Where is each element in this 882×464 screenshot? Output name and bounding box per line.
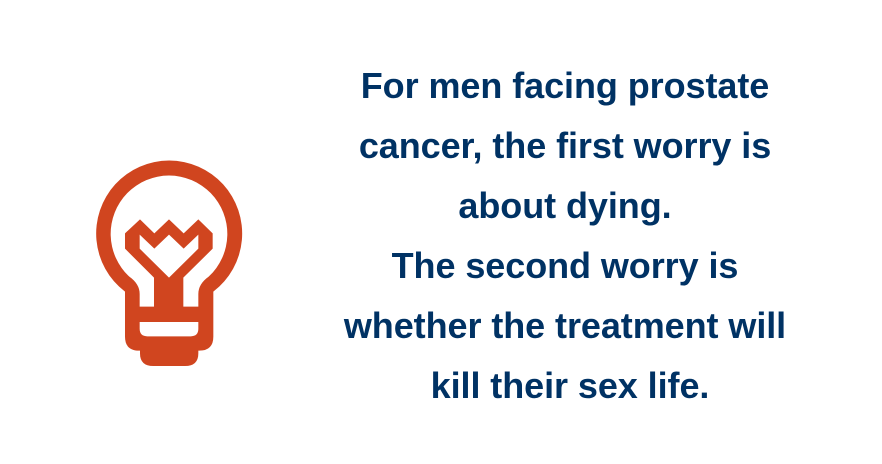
text block: message — [344, 65, 786, 406]
text block: message: about dying. — [458, 185, 672, 226]
text block: message: For men facing prostate — [361, 65, 769, 106]
text block: message: The second worry is — [392, 245, 738, 286]
text block: message: kill their sex life. — [431, 365, 709, 406]
text block: message: whether the treatment will — [344, 305, 786, 346]
text block: message: cancer, the first worry is — [359, 125, 771, 166]
